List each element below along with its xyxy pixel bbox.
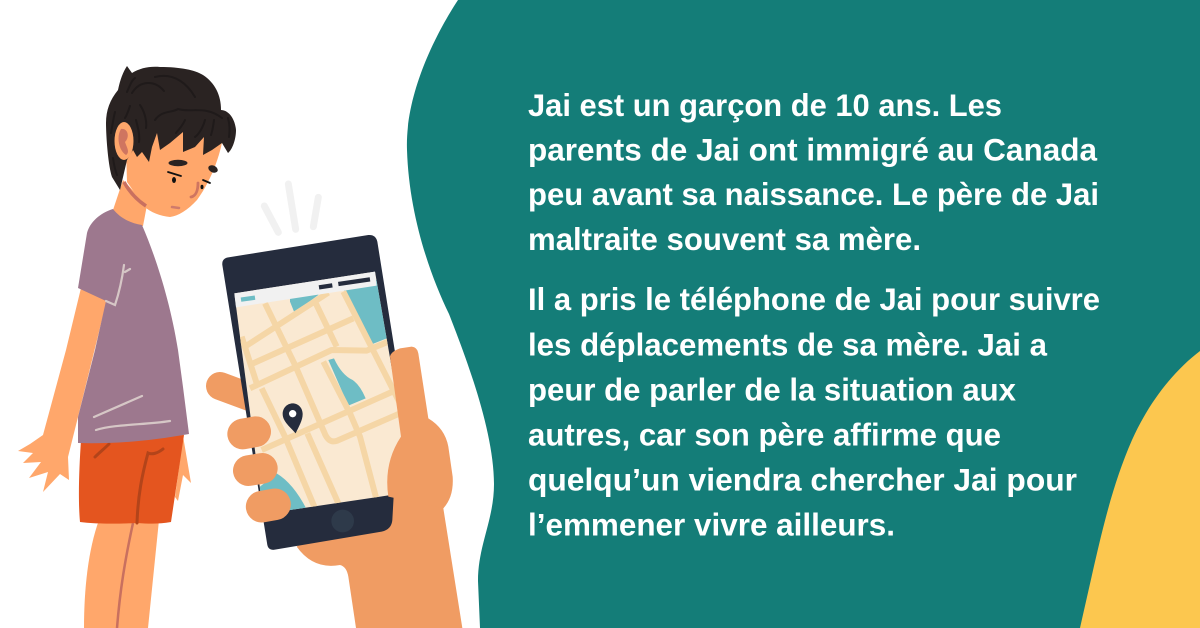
paragraph 2: quelqu’un viendra chercher Jai pour [528, 462, 1077, 498]
paragraph 1: parents de Jai ont immigré au Canada [528, 132, 1097, 168]
paragraph 2: les déplacements de sa mère. Jai a [528, 326, 1047, 362]
boy far arm [175, 430, 191, 501]
mouth [172, 207, 179, 208]
nose [191, 183, 198, 197]
thumb and palm mound [387, 347, 453, 508]
phone body [222, 235, 400, 550]
purple t-shirt [78, 209, 189, 443]
boy near arm and hand [18, 288, 108, 492]
app bar marker [241, 298, 255, 300]
paragraph 2 [528, 281, 1100, 542]
boy legs [84, 520, 159, 628]
arm and palm behind phone [297, 470, 462, 628]
illustration: boy looking down [18, 66, 236, 628]
paragraph 1: maltraite souvent sa mère. [528, 221, 921, 257]
app bar dark items [319, 279, 370, 287]
location pin [283, 403, 303, 433]
top bar of map app [234, 272, 377, 307]
text block [528, 87, 1100, 542]
panel: teal background blob [407, 0, 1200, 628]
water areas [260, 278, 387, 517]
boy ear [114, 122, 134, 160]
index finger behind phone [220, 386, 267, 403]
boy hair [106, 66, 236, 190]
paragraph 1: Jai est un garçon de 10 ans. Les [528, 87, 1002, 123]
eyebrows [168, 160, 219, 174]
boy face [125, 110, 224, 217]
hair strands [111, 76, 230, 175]
paragraph 2: autres, car son père affirme que [528, 416, 1001, 452]
yellow corner shape [1080, 351, 1200, 628]
paragraph 1: peu avant sa naissance. Le père de Jai [528, 176, 1099, 212]
paragraph 1 [528, 87, 1099, 257]
orange shorts [79, 435, 184, 524]
paragraph 2: peur de parler de la situation aux [528, 372, 1016, 408]
boy neck [113, 180, 147, 226]
illustration: hand holding phone with map [220, 184, 462, 628]
paragraph 2: l’emmener vivre ailleurs. [528, 506, 895, 542]
shirt wrinkles [94, 265, 170, 430]
shorts creases [95, 444, 163, 523]
home button [331, 510, 354, 532]
map screen [234, 272, 401, 510]
map background [234, 272, 401, 510]
motion lines above phone [264, 184, 318, 232]
neck shadow [124, 182, 146, 206]
paragraph 2: Il a pris le téléphone de Jai pour suivre [528, 281, 1100, 317]
inner ear [119, 129, 128, 155]
gripping fingers [243, 432, 275, 507]
eyes [168, 172, 210, 189]
map roads [242, 292, 400, 508]
leg line [117, 523, 133, 628]
